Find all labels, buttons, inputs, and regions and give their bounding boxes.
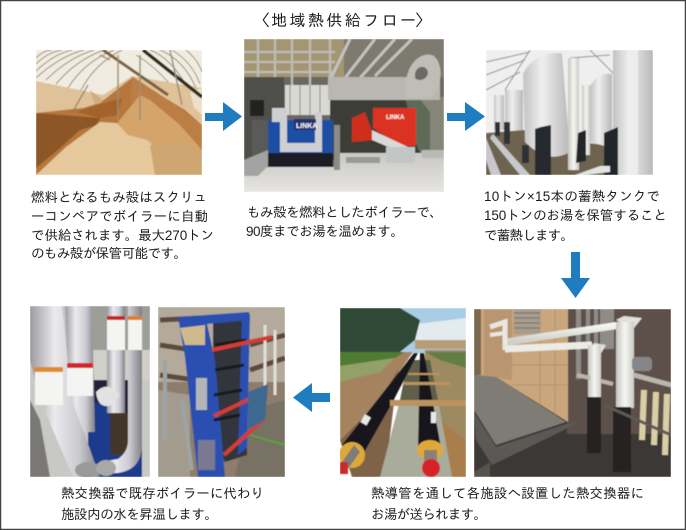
arrow: step 4 to step 5 (293, 383, 330, 412)
photo: insulated pipes in trench (340, 308, 466, 477)
text: step 3 description: 150トンのお湯を保管すること (484, 208, 667, 223)
text: step 3 description: 10トン×15本の蓄熱タンクで (484, 189, 660, 204)
text: step 1 description: 燃料となるもみ殻はスクリュ (31, 190, 207, 205)
arrow: step 3 down to step 4 (561, 252, 590, 298)
text: step 2 description: もみ殻を燃料としたボイラーで、 (247, 205, 443, 220)
title: 〈 (254, 13, 270, 30)
text: step 4 description (371, 486, 644, 522)
title: 〉 (415, 13, 431, 30)
photo: heat storage tanks (486, 50, 653, 175)
text: step 5 description: 熱交換器で既存ボイラーに代わり (61, 486, 264, 501)
photo: rice husk pile (36, 50, 202, 175)
text: step 5 description: 施設内の水を昇温します。 (61, 507, 218, 522)
text: step 1 description: で供給されます。最大270トン (31, 228, 214, 243)
text: step 1 description: ーコンペアでボイラーに自動 (31, 209, 208, 224)
text: step 3 description (484, 189, 667, 243)
text: step 5 description (61, 486, 264, 522)
title: 地域熱供給フロー (271, 12, 416, 30)
arrow: step 1 to step 2 (205, 102, 242, 131)
photo: insulated pipes at heat exchanger (30, 306, 150, 477)
photo: boiler room: LINKA (386, 115, 405, 121)
text: step 3 description: で蓄熱します。 (484, 228, 574, 243)
photo: boiler room: LINKA (296, 123, 317, 130)
photo: plate heat exchanger (158, 307, 285, 477)
arrow: step 2 to step 3 (447, 102, 485, 131)
text: step 4 description: お湯が送られます。 (371, 507, 487, 522)
photo: boiler room (244, 39, 444, 192)
text: step 4 description: 熱導管を通して各施設へ設置した熱交換器に (371, 486, 644, 501)
text: step 1 description: のもみ殻が保管可能です。 (31, 246, 187, 261)
text: step 2 description (246, 205, 443, 239)
text: step 2 description: 90度までお湯を温めます。 (246, 224, 404, 239)
photo: building heat pipes (474, 309, 671, 477)
text: step 1 description (31, 190, 214, 261)
